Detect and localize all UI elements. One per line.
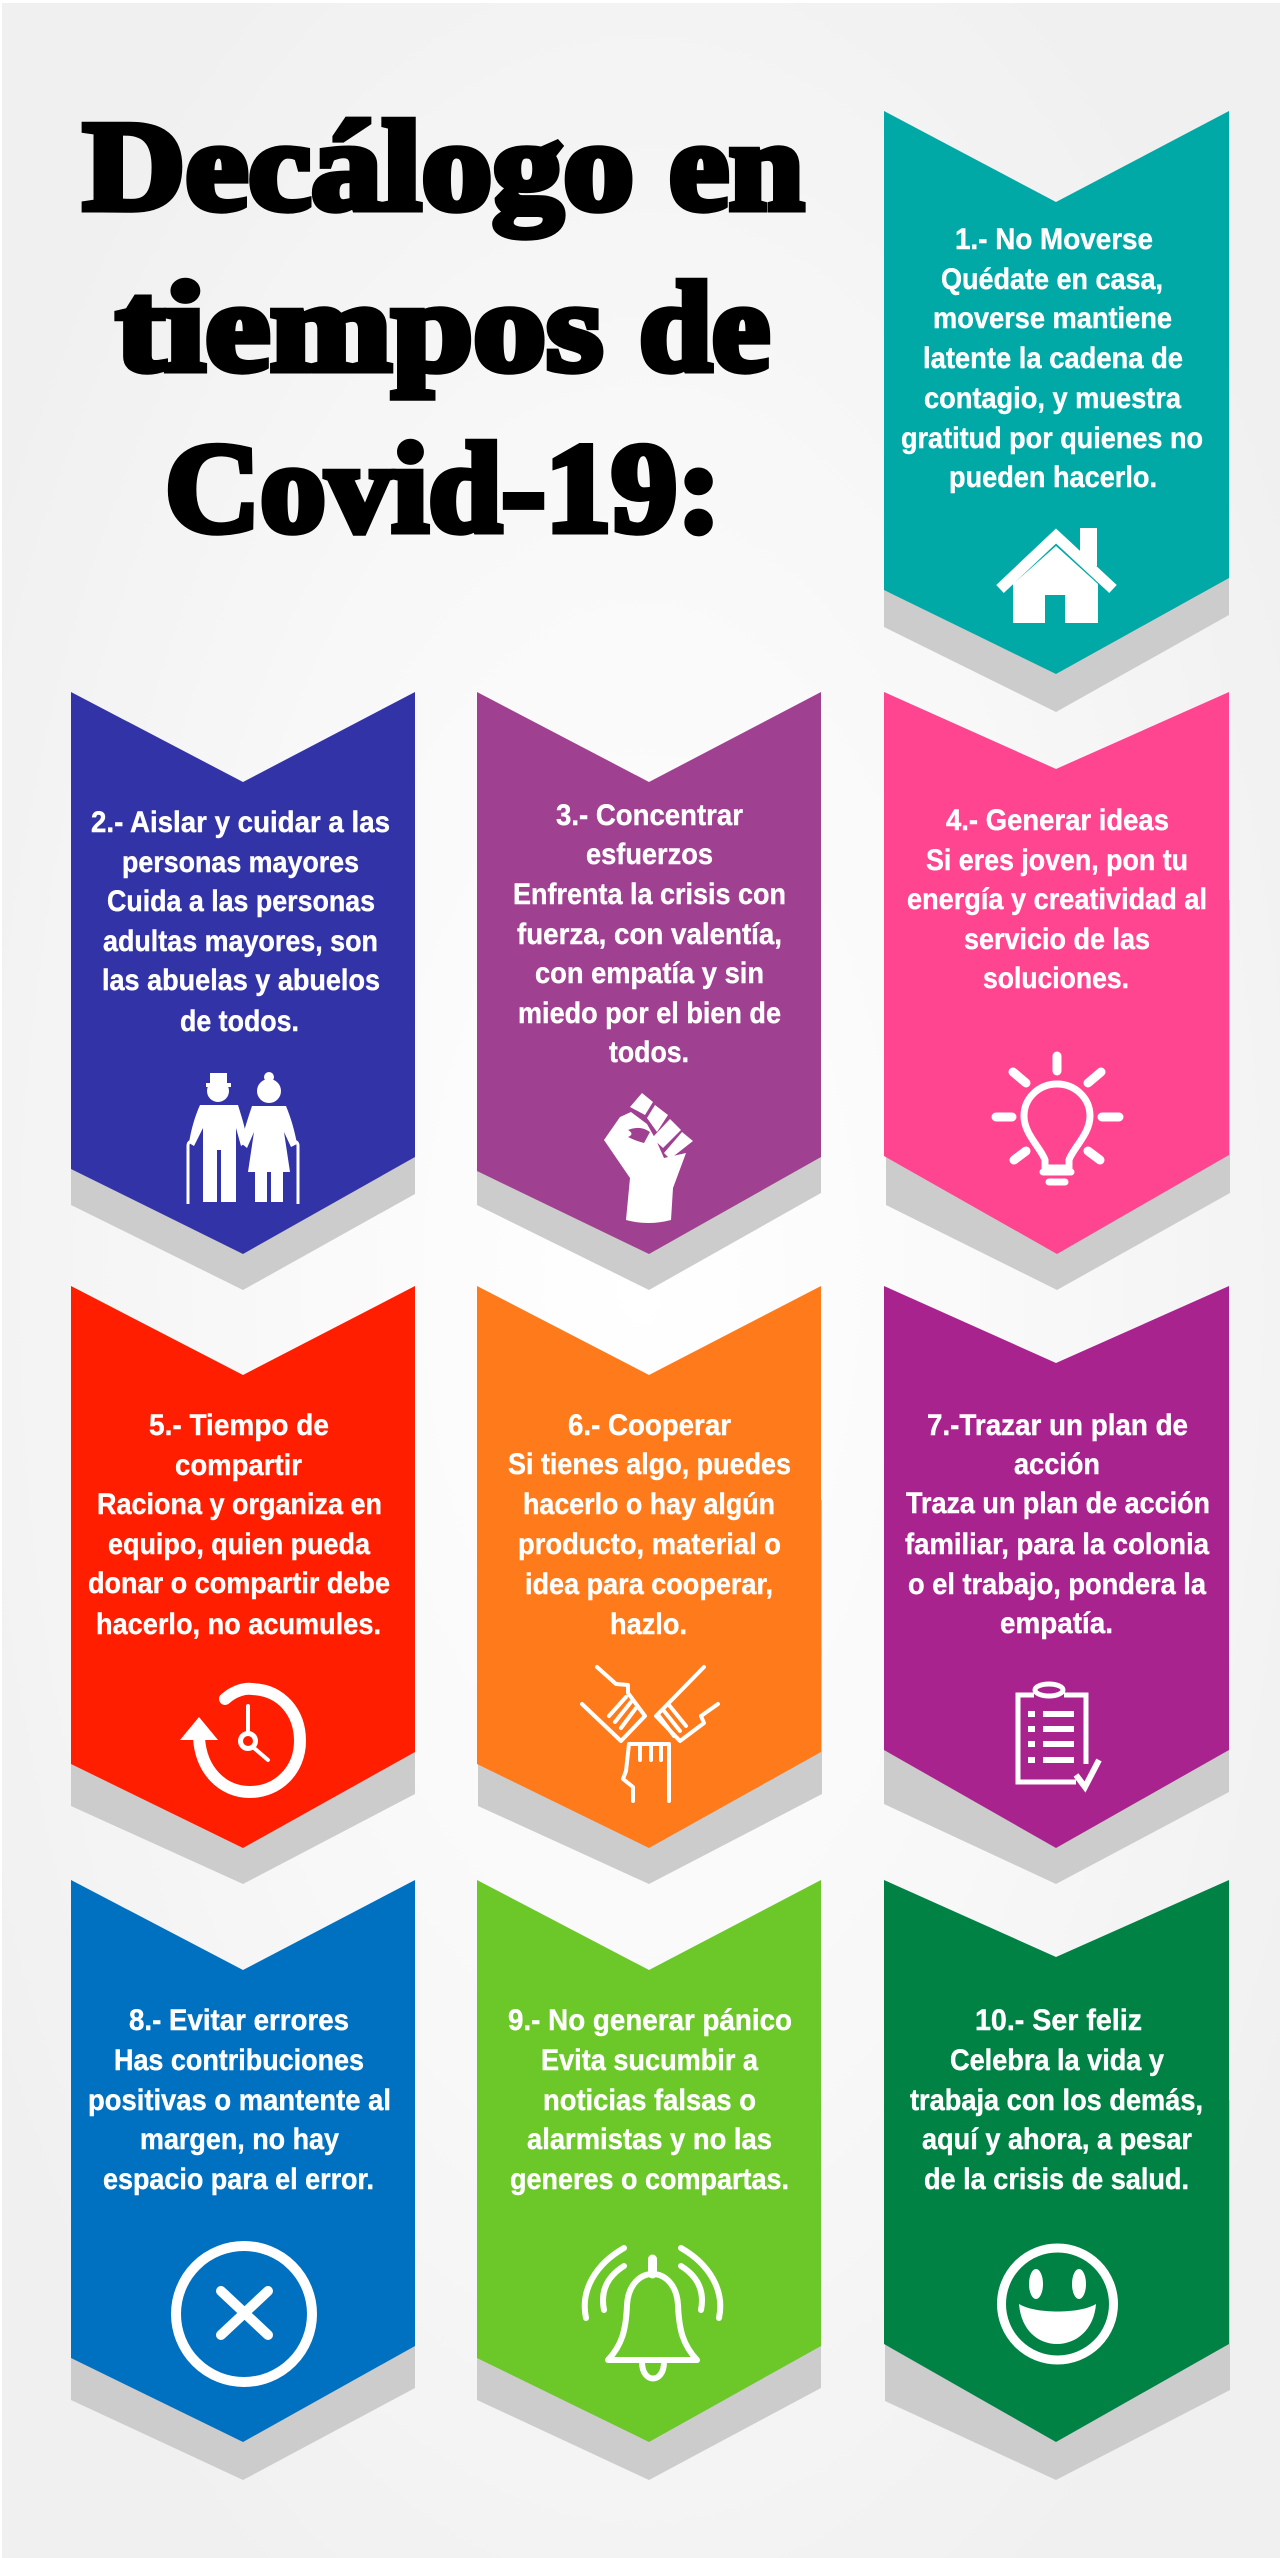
text: step 7: acción (1014, 1448, 1100, 1481)
text: step 2: 2.- Aislar y cuidar a las (91, 806, 390, 839)
text: step 10: Celebra la vida y (950, 2044, 1164, 2077)
text: step 3: miedo por el bien de (518, 997, 781, 1030)
text: step 6: hacerlo o hay algún (523, 1488, 775, 1521)
text: step 1: contagio, y muestra (924, 382, 1181, 415)
text: step 7: familiar, para la colonia (905, 1528, 1209, 1561)
text: step 3: Enfrenta la crisis con (513, 878, 786, 911)
text: step 7: empatía. (1000, 1607, 1113, 1640)
title: tiempos (116, 256, 603, 398)
text: step 8: espacio para el error. (103, 2163, 374, 2196)
text: step 2: de todos. (180, 1005, 299, 1038)
text: step 3: esfuerzos (586, 838, 713, 871)
icon: checklist clipboard (1018, 1684, 1099, 1787)
text: step 2: las abuelas y abuelos (102, 964, 380, 997)
text: step 10 (910, 2004, 1203, 2196)
text: step 7 (905, 1409, 1210, 1640)
text: step 3: 3.- Concentrar (556, 799, 743, 832)
text: step 3: con empatía y sin (535, 957, 764, 990)
text: step 4: 4.- Generar ideas (946, 804, 1169, 837)
text: step 4: servicio de las (964, 923, 1150, 956)
text: step 9: noticias falsas o (543, 2084, 756, 2117)
text: step 3: fuerza, con valentía, (517, 918, 782, 951)
panel: 5 Tiempo de compartir (71, 1286, 415, 1884)
panel: 7 Trazar un plan de acción (884, 1286, 1229, 1884)
text: step 8: 8.- Evitar errores (129, 2004, 349, 2037)
panel: 1 No Moverse (884, 111, 1229, 712)
text: step 7: o el trabajo, pondera la (908, 1568, 1206, 1601)
panel: 6 Cooperar (477, 1286, 822, 1884)
text: step 4: soluciones. (983, 962, 1129, 995)
text: step 10: aquí y ahora, a pesar (922, 2123, 1192, 2156)
panel: 10 Ser feliz (884, 1880, 1230, 2480)
text: step 7: Traza un plan de acción (906, 1487, 1210, 1520)
icon: house (1000, 528, 1113, 623)
icon: smiley face (1002, 2248, 1114, 2360)
icon: ringing bell (585, 2248, 720, 2378)
text: step 3 (513, 799, 786, 1069)
text: step 9: 9.- No generar pánico (508, 2004, 792, 2037)
text: step 1: Quédate en casa, (941, 263, 1163, 296)
text: step 4: Si eres joven, pon tu (926, 844, 1188, 877)
text: step 10: de la crisis de salud. (924, 2163, 1189, 2196)
text: step 1 (901, 223, 1203, 494)
text: step 1: moverse mantiene (933, 302, 1172, 335)
text: step 9 (508, 2004, 792, 2196)
panel: 9 No generar pánico (477, 1880, 821, 2480)
text: step 10: trabaja con los demás, (910, 2084, 1203, 2117)
text: step 8 (88, 2004, 391, 2196)
text: step 9: Evita sucumbir a (541, 2044, 758, 2077)
text: step 5 (88, 1409, 390, 1641)
icon: X in circle (176, 2246, 312, 2382)
text: step 9: generes o compartas. (510, 2163, 789, 2196)
panel: 3 Concentrar esfuerzos (477, 692, 821, 1290)
text: step 6: 6.- Cooperar (568, 1409, 731, 1442)
title (83, 95, 804, 559)
text: step 5: donar o compartir debe (88, 1567, 390, 1600)
text: step 6: producto, material o (518, 1528, 781, 1561)
text: step 4: energía y creatividad al (907, 883, 1207, 916)
text: step 5: 5.- Tiempo de (149, 1409, 329, 1442)
text: step 6: Si tienes algo, puedes (508, 1448, 791, 1481)
text: step 8: margen, no hay (140, 2123, 339, 2156)
text: step 8: positivas o mantente al (88, 2084, 391, 2117)
text: step 2: personas mayores (122, 846, 359, 879)
text: step 6 (508, 1409, 791, 1641)
title: de (639, 256, 770, 398)
panel: 4 Generar ideas (884, 692, 1230, 1290)
text: step 4 (907, 804, 1207, 995)
text: step 2: adultas mayores, son (103, 925, 378, 958)
icon: light bulb (996, 1056, 1119, 1182)
title: Covid-19: (165, 417, 721, 559)
text: step 5: hacerlo, no acumules. (96, 1608, 381, 1641)
icon: clock with arrow (180, 1689, 300, 1792)
icon: cooperating hands (582, 1667, 718, 1801)
text: step 9: alarmistas y no las (527, 2123, 772, 2156)
title: Decálogo (83, 95, 634, 237)
text: step 5: equipo, quien pueda (108, 1528, 370, 1561)
panel: 8 Evitar errores (71, 1880, 415, 2480)
text: step 6: idea para cooperar, (525, 1568, 773, 1601)
text: step 3: todos. (609, 1036, 689, 1069)
text: step 2: Cuida a las personas (107, 885, 375, 918)
icon: raised fist (604, 1093, 693, 1223)
text: step 1: latente la cadena de (923, 342, 1183, 375)
icon: elderly couple (188, 1072, 298, 1204)
text: step 1: gratitud por quienes no (901, 422, 1203, 455)
text: step 10: 10.- Ser feliz (975, 2004, 1142, 2037)
title: en (669, 95, 804, 237)
text: step 6: hazlo. (610, 1608, 687, 1641)
text: step 1: pueden hacerlo. (949, 461, 1157, 494)
panel: 2 Aislar y cuidar (71, 692, 415, 1290)
text: step 7: 7.-Trazar un plan de (927, 1409, 1188, 1442)
text: step 1: 1.- No Moverse (955, 223, 1153, 256)
text: step 5: compartir (175, 1449, 302, 1482)
text: step 5: Raciona y organiza en (97, 1488, 382, 1521)
text: step 2 (91, 806, 390, 1038)
text: step 8: Has contribuciones (114, 2044, 364, 2077)
